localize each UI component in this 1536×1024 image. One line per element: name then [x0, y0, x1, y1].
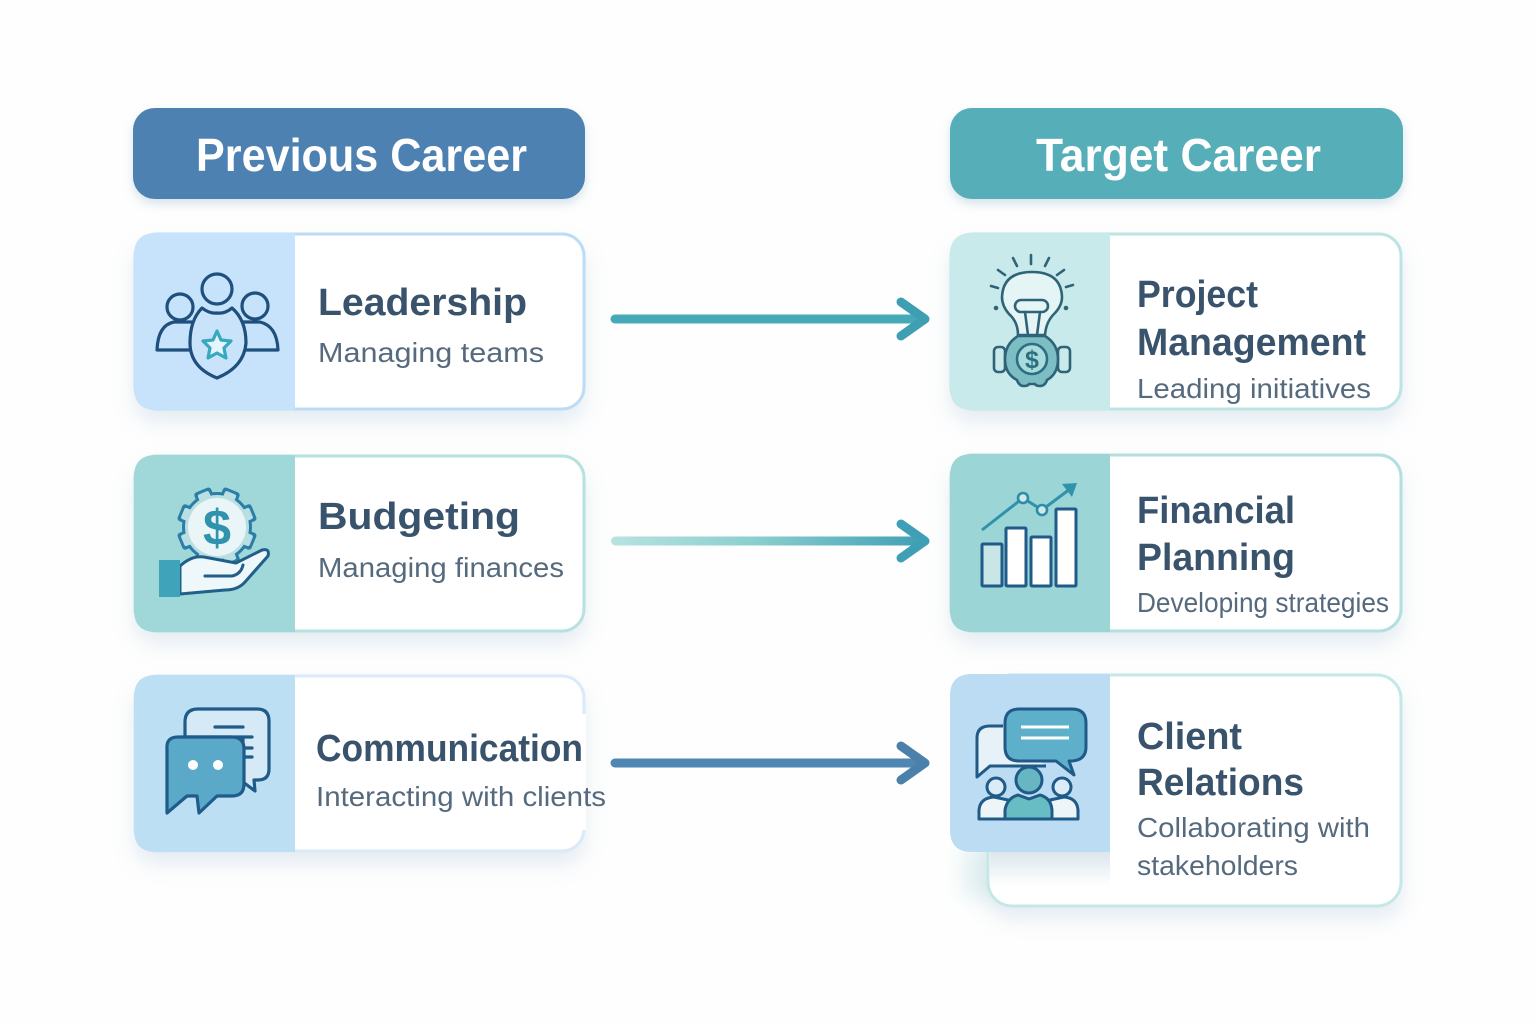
subtitle: Collaborating with stakeholders: stakeholders — [1137, 850, 1298, 881]
icon: lightbulb with gear: $ — [1025, 346, 1039, 374]
panel: Communication — [134, 675, 606, 852]
subtitle: Managing finances: Managing finances — [318, 552, 564, 583]
icon: chat bubbles — [167, 709, 269, 813]
header: Target Career: Target Career — [1036, 129, 1321, 181]
title: Project Management: Management — [1137, 322, 1366, 364]
title: Project Management — [1137, 274, 1366, 364]
panel: Financial Planning — [950, 454, 1401, 632]
title: Client Relations — [1137, 716, 1304, 804]
subtitle: Leading initiatives: Leading initiatives — [1137, 373, 1371, 404]
title: Financial Planning: Planning — [1137, 537, 1295, 579]
subtitle: Interacting with clients: Interacting with clients — [316, 781, 606, 812]
title: Leadership: Leadership — [318, 282, 527, 324]
icon: client group with speech bubbles — [977, 709, 1086, 819]
subtitle: Managing teams: Managing teams — [318, 337, 544, 368]
title: Client Relations: Client — [1137, 716, 1242, 758]
title: Project Management: Project — [1137, 274, 1258, 316]
subtitle: Collaborating with stakeholders: Collaborating with — [1137, 812, 1370, 843]
arrow: Communication to Client Relations — [615, 746, 925, 780]
subtitle: Collaborating with stakeholders — [1137, 812, 1370, 881]
icon: bar chart with rising arrow — [982, 483, 1077, 586]
title: Client Relations: Relations — [1137, 762, 1304, 804]
header: Previous Career: Previous Career — [196, 129, 527, 181]
panel: Leadership — [134, 233, 584, 410]
title: Financial Planning: Financial — [1137, 490, 1295, 532]
title: Communication: Communication — [316, 728, 583, 770]
panel: Client Relations — [950, 674, 1401, 906]
icon: hand holding dollar gear: $ — [203, 500, 231, 556]
arrow: Leadership to Project Management — [615, 302, 925, 336]
panel: Project Management — [950, 233, 1401, 410]
icon: lightbulb with gear — [991, 255, 1073, 386]
icon: team with shield — [157, 274, 278, 378]
subtitle: Developing strategies: Developing strategies — [1137, 587, 1389, 618]
title: Financial Planning — [1137, 490, 1295, 579]
title: Budgeting: Budgeting — [318, 496, 520, 538]
icon: hand holding dollar gear — [159, 487, 268, 597]
header: Previous Career — [133, 108, 585, 199]
arrow: Budgeting to Financial Planning — [611, 524, 925, 558]
header: Target Career — [950, 108, 1403, 199]
panel: Budgeting — [134, 455, 584, 632]
